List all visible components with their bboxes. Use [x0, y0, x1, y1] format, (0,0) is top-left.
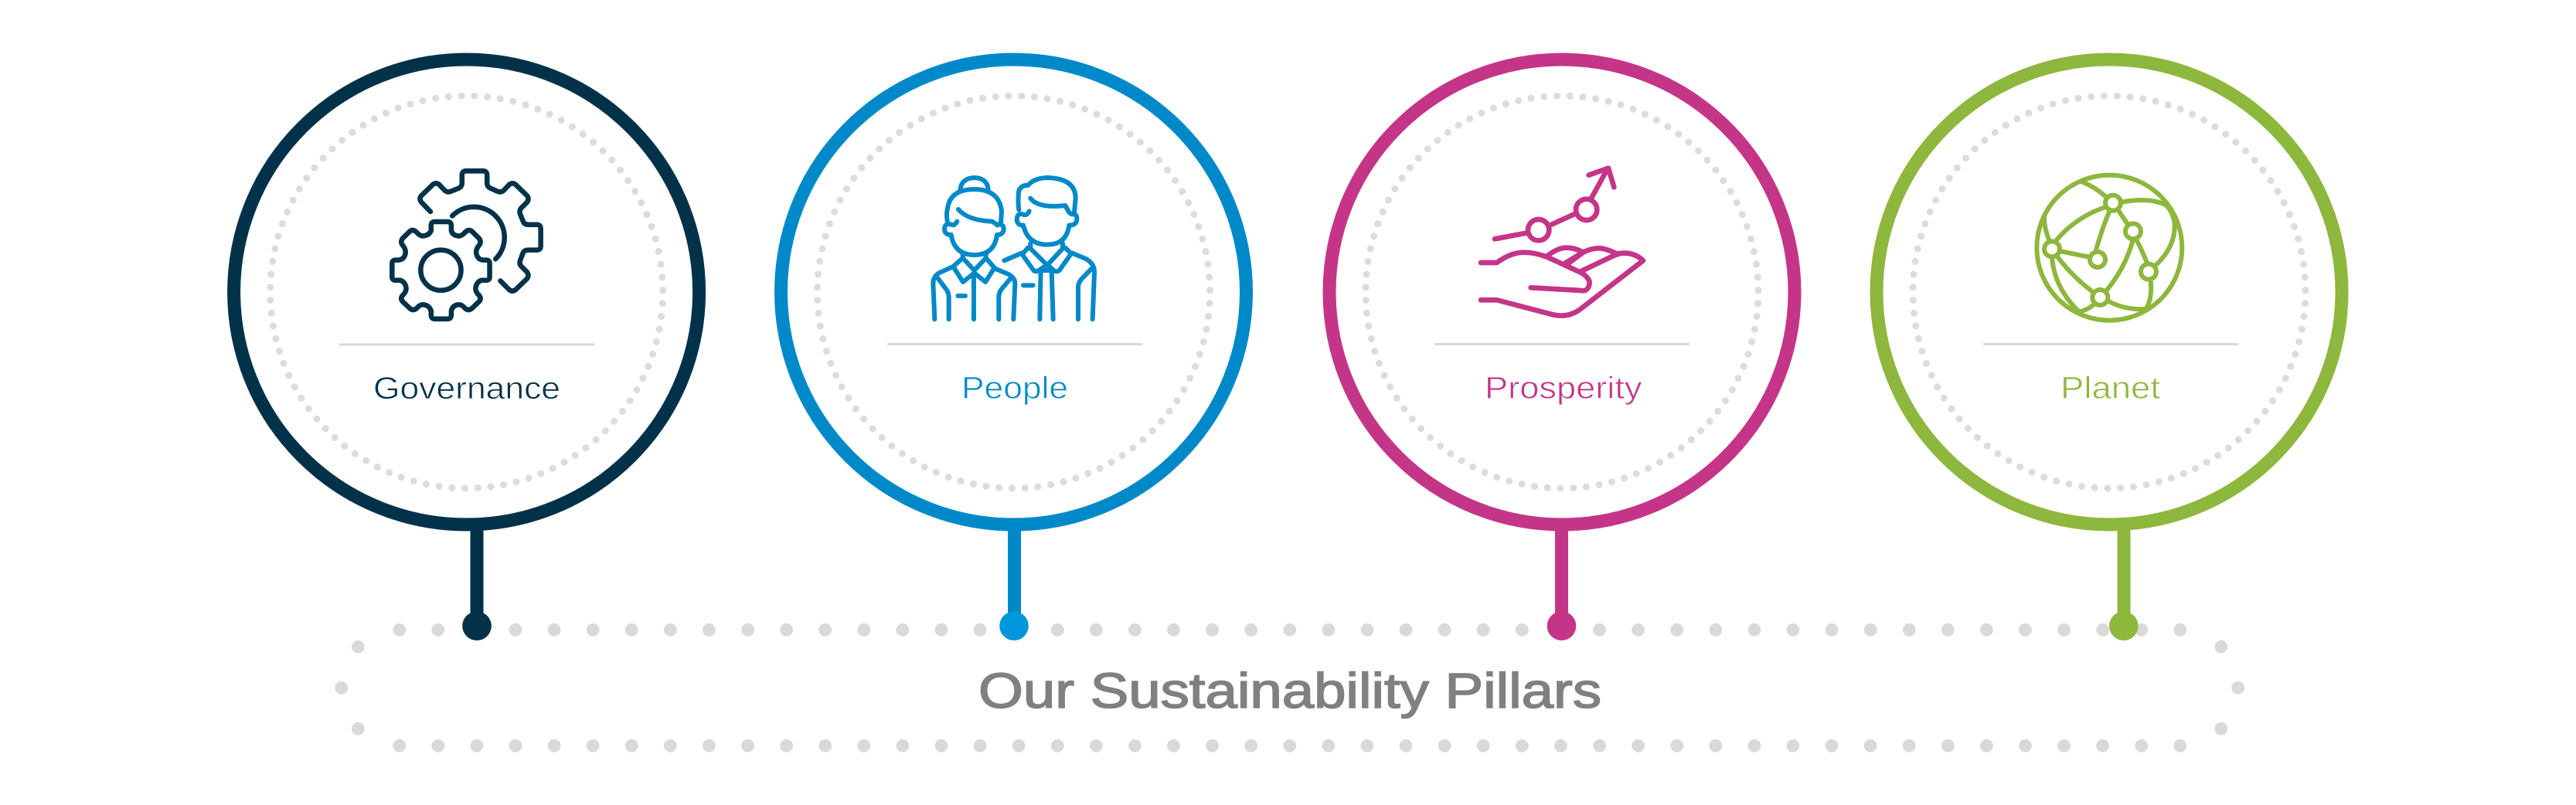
ring: people [781, 59, 1246, 525]
divider: prosperity [1434, 343, 1690, 345]
divider: governance [339, 343, 594, 346]
ring: planet [1877, 59, 2342, 525]
icon: networked globe [2037, 175, 2182, 321]
title: Our Sustainability Pillars [978, 663, 1601, 718]
label: planet: Planet [2060, 371, 2160, 405]
dotted ring: prosperity [1364, 94, 1760, 490]
icon: hand with growth arrow [1481, 168, 1643, 316]
icon: people [933, 178, 1094, 319]
dotted ring: planet [1911, 94, 2307, 490]
ring: governance [234, 59, 699, 525]
dotted ring: people [816, 94, 1211, 490]
connector: people [999, 525, 1029, 640]
connector: governance [462, 525, 492, 640]
connector: prosperity [1547, 525, 1576, 640]
icon: gears [392, 171, 541, 319]
label: governance: Governance [373, 372, 560, 406]
panel: people [781, 59, 1246, 640]
divider: planet [1983, 343, 2238, 345]
panel: governance [234, 59, 699, 640]
divider: people [887, 343, 1142, 345]
dotted frame [335, 630, 2244, 746]
dotted ring: governance [269, 94, 665, 490]
panel: planet [1877, 59, 2342, 640]
ring: prosperity [1329, 59, 1795, 525]
panel: prosperity [1329, 59, 1795, 640]
connector: planet [2109, 525, 2139, 640]
label: prosperity: Prosperity [1485, 371, 1642, 405]
label: people: People [961, 371, 1068, 405]
